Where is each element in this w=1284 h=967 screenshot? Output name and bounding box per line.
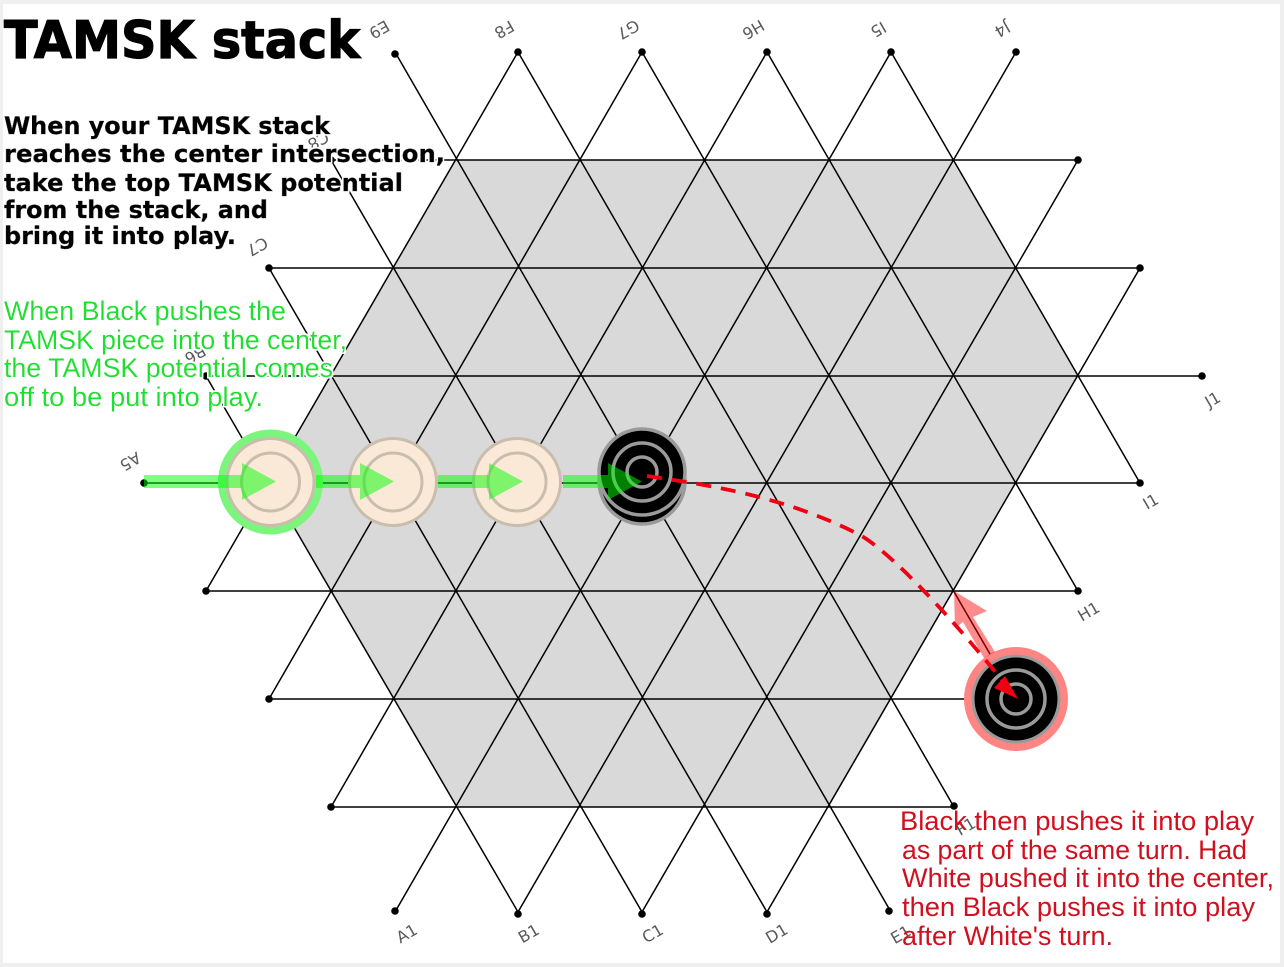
board: coordinate labels: E9	[366, 16, 393, 43]
red explanation text: White pushed it into the center,	[902, 863, 1274, 893]
board: coordinate labels: C7	[243, 233, 271, 260]
black TAMSK potential piece in play	[973, 656, 1059, 742]
TAMSK piece: start	[227, 438, 314, 526]
instructions: black text block	[4, 112, 445, 250]
board: coordinate labels: B1	[515, 920, 543, 947]
board: edge node dots	[140, 48, 1206, 918]
title: TAMSK stack	[4, 11, 361, 71]
green explanation text: the TAMSK potential comes	[4, 353, 333, 383]
red explanation text: after White's turn.	[902, 921, 1113, 951]
board: coordinate labels: A1	[393, 920, 421, 947]
instructions: black text block: reaches the center intersection,	[4, 140, 445, 168]
board: coordinate labels: H6	[739, 16, 768, 43]
board: coordinate labels: J1	[1201, 388, 1224, 412]
instructions: black text block: from the stack, and	[4, 196, 268, 224]
board: coordinate labels: I1	[1140, 490, 1162, 514]
board: coordinate labels: F8	[491, 16, 517, 43]
board: triangular grid lines	[144, 52, 1202, 912]
green explanation text	[4, 296, 347, 412]
pink arrow: push into play	[954, 591, 995, 658]
board: coordinate labels: C8	[304, 127, 332, 154]
board: central grey hexagon	[269, 160, 1078, 807]
red explanation text: as part of the same turn. Had	[902, 835, 1247, 865]
red explanation text: then Black pushes it into play	[902, 892, 1255, 922]
red dashed curve: potential path	[647, 476, 1010, 690]
instructions: black text block: take the top TAMSK potential	[4, 169, 403, 197]
red explanation text	[900, 806, 1274, 951]
board: coordinate labels: H1	[1074, 598, 1103, 625]
green explanation text: TAMSK piece into the center,	[4, 325, 347, 355]
board: coordinate labels: G7	[614, 16, 643, 43]
board: coordinate labels: F1	[953, 813, 979, 840]
green explanation text: off to be put into play.	[4, 382, 263, 412]
board: coordinate labels: I5	[867, 17, 889, 41]
board: coordinate labels: J4	[991, 17, 1014, 41]
board: coordinate labels: C1	[639, 920, 667, 947]
instructions: black text block: bring it into play.	[4, 222, 236, 250]
board: coordinate labels: E1	[887, 921, 914, 948]
red arrowhead	[994, 676, 1018, 699]
black TAMSK stack at center	[599, 429, 685, 524]
green push arrows along the row	[144, 463, 642, 500]
instructions: black text block: When your TAMSK stack	[4, 112, 331, 140]
TAMSK piece: second position	[350, 438, 436, 526]
board: coordinate labels: D1	[762, 920, 791, 947]
TAMSK piece: third position	[474, 438, 560, 526]
board: coordinate labels: A5	[116, 448, 144, 475]
potential piece halo	[964, 647, 1068, 751]
board: coordinate labels: B6	[181, 341, 209, 368]
red explanation text: Black then pushes it into play	[900, 806, 1254, 836]
green explanation text: When Black pushes the	[4, 296, 286, 326]
green halo around starting stack	[218, 430, 323, 534]
